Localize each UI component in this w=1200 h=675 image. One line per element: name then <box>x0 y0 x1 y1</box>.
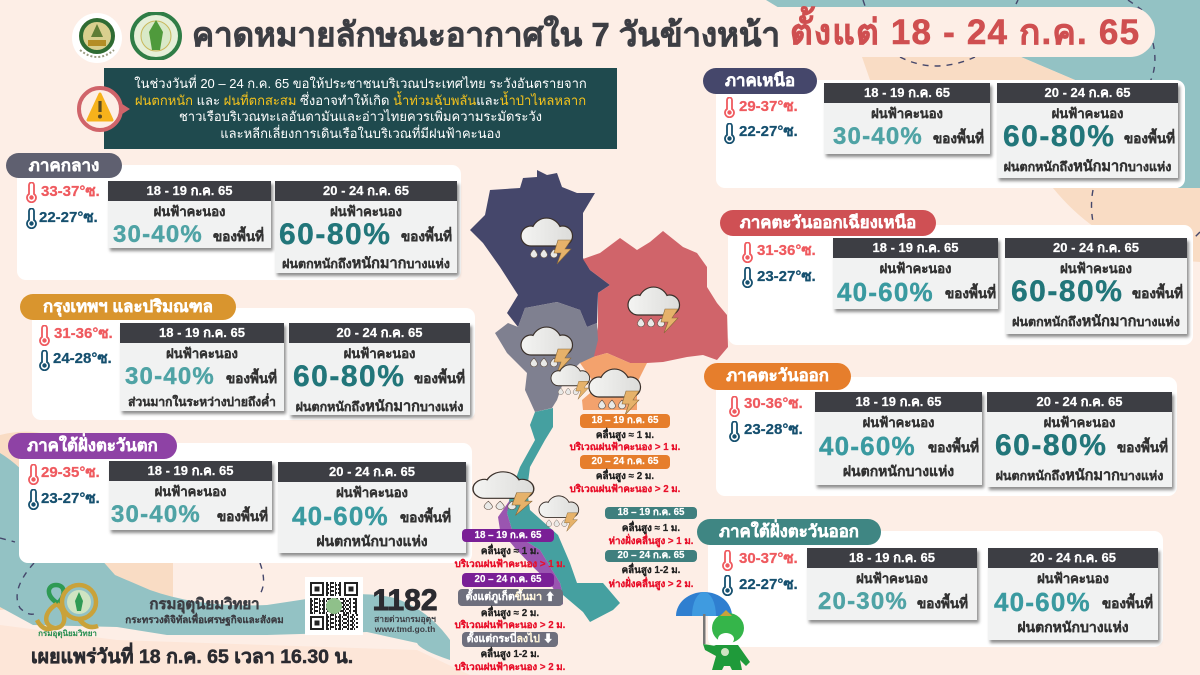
callout: gulf waves: คลื่นสูง ≈ 1 ม. <box>622 523 680 534</box>
heading: northeast <box>720 210 936 236</box>
icon: hot thermometer <box>26 182 37 203</box>
forecast 18-19: ส่วนมากในระหว่างบ่ายถึงค่ำ <box>128 395 276 409</box>
forecast 20-24: ฝนตกหนักถึงหนักมากบางแห่ง <box>296 399 463 415</box>
forecast 20-24: ของพื้นที่ <box>1117 440 1168 455</box>
forecast 18-19: ของพื้นที่ <box>933 131 984 146</box>
callout: andaman waves: ตั้งแต่ภูเก็ตขึ้นมา ⬆ <box>466 591 555 603</box>
forecast 20-24: 60-80% <box>1011 275 1123 308</box>
heading: south east coast <box>697 519 881 545</box>
heading: central <box>6 153 122 178</box>
icon: hot thermometer <box>39 325 50 346</box>
callout: andaman waves: บริเวณฝนฟ้าคะนอง > 2 ม. <box>455 662 565 673</box>
icon: storm cloud east <box>589 369 641 415</box>
forecast 20-24: 60-80% <box>1003 120 1115 153</box>
panel: south east coast <box>697 519 1163 647</box>
panel: northeast <box>720 210 1193 345</box>
forecast 18-19: ฝนฟ้าคะนอง <box>880 261 951 276</box>
department name <box>125 596 284 626</box>
icon: storm cloud central <box>521 327 573 373</box>
warning text box: และหลีกเลี่ยงการเดินเรือในบริเวณที่มีฝนฟ้าคะนอง <box>220 126 501 140</box>
forecast 20-24: ของพื้นที่ <box>400 510 451 525</box>
warning text box: ชาวเรือบริเวณทะเลอันดามันและอ่าวไทยควรเพิ่มความระมัดระวัง <box>179 109 542 124</box>
region: south east coast <box>507 408 620 622</box>
heading: north <box>703 68 817 94</box>
forecast 20-24: ฝนฟ้าคะนอง <box>330 204 402 219</box>
icon: 80th anniversary logo <box>35 582 99 638</box>
icon: cold thermometer <box>28 489 39 510</box>
website: www.tmd.go.th <box>375 624 435 634</box>
min temperature: 22-27°ซ. <box>739 123 798 140</box>
icon: cold thermometer <box>26 208 37 229</box>
forecast 18-19: 18 - 19 ก.ค. 65 <box>849 550 935 565</box>
forecast 20-24: 20 - 24 ก.ค. 65 <box>1030 550 1116 565</box>
callout: gulf waves: ห่างฝั่งคลื่นสูง > 2 ม. <box>609 579 693 590</box>
heading: east: ภาคตะวันออก <box>726 366 829 385</box>
forecast 20-24: 20 - 24 ก.ค. 65 <box>323 183 409 198</box>
forecast 18-19: ฝนฟ้าคะนอง <box>154 204 225 219</box>
icon: hot thermometer <box>28 464 39 485</box>
forecast 18-19: ฝนฟ้าคะนอง <box>155 484 226 499</box>
forecast 20-24 <box>997 83 1178 178</box>
callout: gulf waves: คลื่นสูง 1-2 ม. <box>622 565 680 576</box>
forecast 18-19: ของพื้นที่ <box>226 371 277 386</box>
forecast 18-19 <box>824 83 990 154</box>
forecast 20-24: ของพื้นที่ <box>1102 596 1153 611</box>
callout: gulf waves: 18 – 19 ก.ค. 65 <box>618 507 684 518</box>
panel: south west coast <box>8 433 472 563</box>
icon: hot thermometer <box>722 550 733 571</box>
min temperature: 23-27°ซ. <box>757 268 816 285</box>
forecast 20-24: ของพื้นที่ <box>1124 131 1175 146</box>
callout: gulf waves <box>605 507 697 590</box>
callout: andaman waves: 18 – 19 ก.ค. 65 <box>475 530 541 541</box>
warning text box: ในช่วงวันที่ 20 – 24 ก.ค. 65 ขอให้ประชาชนบริเวณประเทศไทย ระวังอันตรายจาก <box>134 76 587 91</box>
callout: andaman waves: คลื่นสูง ≈ 2 ม. <box>481 608 539 619</box>
min temperature: 23-27°ซ. <box>41 490 100 507</box>
icon: mascot with umbrella <box>676 592 750 670</box>
callout: east coast waves: คลื่นสูง ≈ 1 ม. <box>596 430 654 441</box>
forecast 18-19: 18 - 19 ก.ค. 65 <box>864 85 950 100</box>
callout: east coast waves: 20 – 24 ก.ค. 65 <box>592 456 658 467</box>
title banner <box>70 7 1155 57</box>
callout: east coast waves: บริเวณฝนฟ้าคะนอง > 2 ม. <box>570 484 680 495</box>
heading: bangkok: กรุงเทพฯ และปริมณฑล <box>43 297 213 316</box>
hotline: 1182 <box>372 584 438 617</box>
callout: andaman waves: คลื่นสูง 1-2 ม. <box>481 649 539 660</box>
heading: south east coast: ภาคใต้ฝั่งตะวันออก <box>719 522 859 541</box>
forecast 18-19 <box>807 548 977 620</box>
callout: andaman waves <box>454 529 565 673</box>
forecast 20-24: 40-60% <box>292 501 389 531</box>
forecast 18-19: 30-40% <box>833 123 923 150</box>
icon: hot thermometer <box>729 396 740 417</box>
icon: storm cloud northeast <box>628 287 680 333</box>
forecast 18-19: ฝนฟ้าคะนอง <box>863 415 934 430</box>
hotline caption: สายด่วนกรมอุตุฯ <box>374 614 436 624</box>
forecast 20-24 <box>988 548 1158 640</box>
callout: andaman waves: คลื่นสูง ≈ 1 ม. <box>481 546 539 557</box>
icon: storm cloud north <box>521 218 573 264</box>
callout: andaman waves: บริเวณฝนฟ้าคะนอง > 1 ม. <box>455 559 565 570</box>
region: east <box>580 353 647 410</box>
title: ตั้งแต่ 18 - 24 ก.ค. 65 <box>790 13 1140 52</box>
forecast 18-19: ฝนฟ้าคะนอง <box>856 571 928 586</box>
forecast 20-24: ฝนฟ้าคะนอง <box>1037 571 1109 586</box>
icon: cold thermometer <box>722 575 733 596</box>
forecast 20-24: 20 - 24 ก.ค. 65 <box>329 464 415 479</box>
forecast 20-24: 20 - 24 ก.ค. 65 <box>1037 394 1122 409</box>
callout: east coast waves: บริเวณฝนฟ้าคะนอง > 1 ม. <box>570 442 680 453</box>
forecast 20-24: 40-60% <box>994 587 1091 617</box>
region: northeast <box>583 231 728 363</box>
icon: warning triangle <box>77 86 130 132</box>
forecast 18-19: 40-60% <box>837 277 934 307</box>
callout: east coast waves: 18 – 19 ก.ค. 65 <box>592 415 658 426</box>
forecast 18-19: 18 - 19 ก.ค. 65 <box>147 183 232 198</box>
max temperature: 31-36°ซ. <box>54 325 113 342</box>
icon: storm cloud south east <box>539 496 579 531</box>
forecast 18-19 <box>120 323 284 411</box>
forecast 18-19: ฝนฟ้าคะนอง <box>871 106 943 121</box>
title: คาดหมายลักษณะอากาศใน 7 วันข้างหน้า <box>192 16 780 53</box>
forecast 20-24 <box>278 462 466 553</box>
icon: cold thermometer <box>39 350 50 371</box>
warning panel <box>77 68 617 149</box>
forecast 20-24: ฝนฟ้าคะนอง <box>344 346 415 361</box>
warning text box: ฝนตกหนัก และ ฝนที่ตกสะสม ซึ่งอาจทำให้เกิด น้ำท่วมฉับพลันและน้ำป่าไหลหลาก <box>135 92 586 108</box>
forecast 20-24: 20 - 24 ก.ค. 65 <box>337 325 422 340</box>
ministry name: กระทรวงดิจิทัลเพื่อเศรษฐกิจและสังคม <box>125 615 284 626</box>
department name: กรมอุตุนิยมวิทยา <box>149 596 260 613</box>
forecast 18-19: ฝนตกหนักบางแห่ง <box>843 463 954 479</box>
callout: andaman waves: 20 – 24 ก.ค. 65 <box>475 574 541 585</box>
forecast 18-19 <box>109 461 272 530</box>
callout: east coast waves: คลื่นสูง ≈ 2 ม. <box>596 471 654 482</box>
forecast 20-24: ฝนตกหนักถึงหนักมากบางแห่ง <box>1012 314 1180 330</box>
forecast 20-24: 20 - 24 ก.ค. 65 <box>1045 85 1130 100</box>
callout: andaman waves: บริเวณฝนฟ้าคะนอง > 2 ม. <box>455 620 565 631</box>
forecast 18-19: 18 - 19 ก.ค. 65 <box>856 394 941 409</box>
forecast 18-19: ของพื้นที่ <box>213 229 264 244</box>
forecast 18-19: 18 - 19 ก.ค. 65 <box>148 463 233 478</box>
forecast 18-19: 20-30% <box>818 588 908 615</box>
heading: north: ภาคเหนือ <box>725 71 795 90</box>
max temperature: 29-35°ซ. <box>41 464 100 481</box>
forecast 18-19: 40-60% <box>819 431 916 461</box>
min temperature: 22-27°ซ. <box>739 576 798 593</box>
forecast 20-24 <box>1005 238 1187 334</box>
heading: south west coast <box>8 433 177 459</box>
logo: royal emblem <box>72 13 122 63</box>
max temperature: 29-37°ซ. <box>739 98 798 115</box>
forecast 18-19: ของพื้นที่ <box>928 440 979 455</box>
heading: east <box>704 363 851 390</box>
heading: south west coast: ภาคใต้ฝั่งตะวันตก <box>27 436 158 455</box>
panel: north <box>703 68 1185 188</box>
heading: central: ภาคกลาง <box>29 156 99 175</box>
forecast 18-19: 18 - 19 ก.ค. 65 <box>873 240 958 255</box>
forecast 18-19 <box>108 181 271 248</box>
forecast 20-24 <box>289 323 470 415</box>
forecast 20-24: ฝนตกหนักบางแห่ง <box>316 533 428 549</box>
region: south west coast <box>498 500 563 605</box>
min temperature: 23-28°ซ. <box>744 421 803 438</box>
forecast 20-24: ฝนฟ้าคะนอง <box>1044 415 1115 430</box>
forecast 20-24: ฝนฟ้าคะนอง <box>1052 106 1123 121</box>
panel: east <box>704 363 1177 496</box>
title <box>192 6 1140 53</box>
publish date: เผยแพร่วันที่ 18 ก.ค. 65 เวลา 16.30 น. <box>31 646 353 668</box>
icon: storm cloud south west <box>473 472 534 515</box>
forecast 20-24: ฝนตกหนักบางแห่ง <box>1017 619 1129 635</box>
forecast 20-24 <box>275 181 457 273</box>
callout: andaman waves: ตั้งแต่กระบี่ลงไป ⬇ <box>467 633 553 645</box>
forecast 18-19: 30-40% <box>125 363 215 390</box>
QR code <box>305 577 363 635</box>
forecast 20-24: ฝนตกหนักถึงหนักมากบางแห่ง <box>282 256 450 272</box>
forecast 18-19 <box>815 392 982 485</box>
heading: northeast: ภาคตะวันออกเฉียงเหนือ <box>740 213 916 232</box>
icon: cold thermometer <box>724 123 735 144</box>
min temperature: 24-28°ซ. <box>53 350 112 367</box>
forecast 20-24: ฝนตกหนักถึงหนักมากบางแห่ง <box>996 468 1163 484</box>
icon: storm cloud bangkok <box>551 365 590 399</box>
forecast 18-19 <box>833 238 998 309</box>
callout: gulf waves: 20 – 24 ก.ค. 65 <box>618 550 684 561</box>
logo caption: กรมอุตุนิยมวิทยา <box>38 629 97 638</box>
forecast 18-19: ของพื้นที่ <box>945 286 996 301</box>
warning text box <box>104 68 617 149</box>
hotline <box>372 584 438 634</box>
max temperature: 31-36°ซ. <box>757 242 816 259</box>
max temperature: 30-36°ซ. <box>744 395 803 412</box>
icon: hot thermometer <box>742 242 753 263</box>
forecast 20-24: ฝนฟ้าคะนอง <box>336 485 408 500</box>
callout: east coast waves <box>570 414 680 495</box>
heading: bangkok <box>20 294 236 320</box>
min temperature: 22-27°ซ. <box>39 209 98 226</box>
forecast 20-24: 60-80% <box>995 429 1107 462</box>
forecast 20-24: ฝนตกหนักถึงหนักมากบางแห่ง <box>1004 159 1171 175</box>
forecast 20-24: ฝนฟ้าคะนอง <box>1060 261 1132 276</box>
forecast 20-24: 60-80% <box>293 360 405 393</box>
forecast 20-24: ของพื้นที่ <box>414 371 465 386</box>
forecast 18-19: 18 - 19 ก.ค. 65 <box>159 325 245 340</box>
forecast 20-24: 20 - 24 ก.ค. 65 <box>1053 240 1139 255</box>
forecast 18-19: 30-40% <box>113 221 203 248</box>
icon: cold thermometer <box>729 421 740 442</box>
forecast 18-19: ของพื้นที่ <box>217 509 268 524</box>
max temperature: 33-37°ซ. <box>41 183 100 200</box>
panel: central <box>6 153 461 280</box>
icon: cold thermometer <box>742 267 753 288</box>
forecast 18-19: ของพื้นที่ <box>917 596 968 611</box>
forecast 20-24 <box>987 392 1172 487</box>
forecast 20-24: ของพื้นที่ <box>401 229 452 244</box>
panel: bangkok <box>20 294 475 420</box>
forecast 18-19: ฝนฟ้าคะนอง <box>166 346 238 361</box>
forecast 20-24: ของพื้นที่ <box>1132 286 1183 301</box>
logo: meteorological department <box>130 12 182 60</box>
forecast 18-19: 30-40% <box>111 501 201 528</box>
icon: hot thermometer <box>724 97 735 118</box>
region: central <box>495 302 598 412</box>
forecast 20-24: 60-80% <box>279 218 391 251</box>
callout: gulf waves: ห่างฝั่งคลื่นสูง > 1 ม. <box>609 536 693 547</box>
max temperature: 30-37°ซ. <box>739 550 798 567</box>
region: north <box>470 170 610 327</box>
